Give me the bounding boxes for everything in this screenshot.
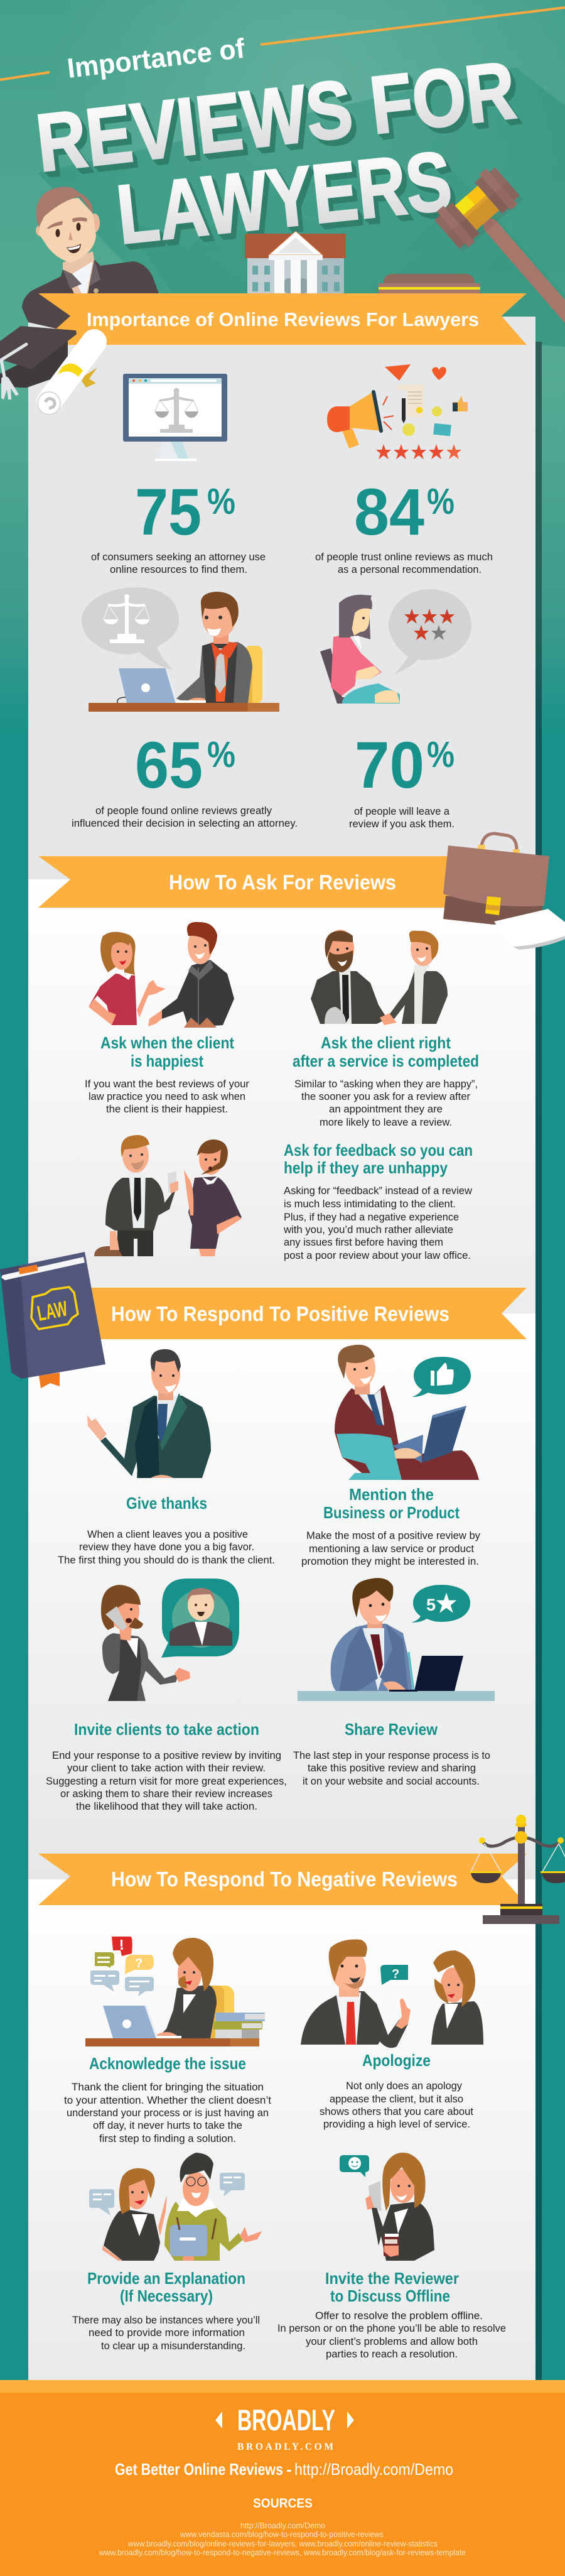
stat: 65%: 65 [135, 729, 203, 802]
text: ask after service [294, 1078, 478, 1128]
banner: How To Respond To Negative Reviews [38, 1854, 527, 1905]
heading: Acknowledge the issue: Acknowledge the issue [89, 2054, 246, 2073]
banner: Importance of Online Reviews [38, 293, 527, 345]
heading: Provide an Explanation: (If Necessary) [120, 2286, 213, 2305]
illustration: woman and man explaining [89, 2153, 262, 2261]
illustration: courthouse [245, 231, 346, 293]
text: ask after service: the sooner you ask for a review after [301, 1090, 470, 1102]
heading: Ask for feedback: help if they are unhappy [284, 1158, 448, 1177]
title: Lawyers: LAWYERS [113, 134, 456, 262]
text: acknowledge [64, 2081, 271, 2144]
panel: white content sheet [28, 317, 542, 2380]
heading: Invite the Reviewer: Invite the Reviewer [325, 2269, 459, 2288]
text: provide explanation: There may also be instances where you’ll [72, 2314, 260, 2326]
text: apologize: providing a high level of service. [323, 2118, 470, 2130]
illustration: woman on phone [101, 1579, 239, 1701]
heading: Mention the Business or Product [323, 1485, 460, 1522]
text: mention business: promotion they might be interested in. [301, 1555, 479, 1567]
stat: 84%: 84 [354, 476, 424, 549]
text: 65% caption: of people found online reviews greatly [95, 805, 272, 817]
text: acknowledge: Thank the client for bringing the situation [72, 2081, 264, 2093]
banner: Importance of Online Reviews: Importance of Online Reviews For Lawyers [87, 308, 479, 330]
stat: 75%: 75 [135, 476, 202, 549]
logo: Broadly: BROADLY [237, 2403, 335, 2437]
text: ask for feedback: any issues first before having them [284, 1236, 443, 1248]
banner: How To Respond To Positive Reviews: How To Respond To Positive Reviews [111, 1302, 449, 1325]
text: apologize: appease the client, but it also [330, 2093, 463, 2105]
banner: How To Respond To Negative Reviews: How To Respond To Negative Reviews [111, 1867, 458, 1891]
text: acknowledge: off day, it never hurts to take the [93, 2119, 242, 2131]
text: discuss offline: In person or on the phone you’ll be able to resolve [277, 2322, 506, 2334]
text: invite clients: or asking them to share their review increases [60, 1788, 272, 1800]
text: discuss offline [277, 2310, 506, 2360]
heading: Provide an Explanation [87, 2269, 245, 2305]
text: provide explanation: to clear up a misunderstanding. [101, 2340, 245, 2352]
illustration: man sharing review: 5 [426, 1595, 436, 1614]
illustration: man giving thanks [87, 1349, 211, 1478]
heading: Invite the Reviewer [325, 2269, 459, 2305]
text: give thanks: review they have done you a big favor. [79, 1541, 254, 1553]
illustration: woman with feedback bubbles: ? [135, 1957, 143, 1970]
illustration: two men shaking hands [311, 930, 448, 1025]
text: ask for feedback: is much less intimidating to the client. [284, 1198, 456, 1210]
text: share review [293, 1749, 490, 1787]
text: Broadly.com: BROADLY.COM [237, 2442, 333, 2452]
text: invite clients [46, 1749, 287, 1812]
text: 70% caption: review if you ask them. [349, 818, 455, 830]
text: discuss offline: Offer to resolve the problem offline. [315, 2310, 483, 2322]
illustration: woman and man talking [89, 922, 234, 1028]
text: apologize: shows others that you care about [320, 2106, 473, 2117]
title accent lines [0, 8, 565, 80]
text: invite clients: your client to take action with their review. [67, 1762, 266, 1774]
icon: monitor with scales [123, 374, 227, 461]
illustration: man apologizing to woman [301, 1940, 483, 2048]
text: ask when happiest [85, 1078, 249, 1115]
text: ask after service: Similar to “asking when they are happy”, [294, 1078, 478, 1090]
text: ask when happiest: If you want the best reviews of your [85, 1078, 249, 1090]
footer panel [0, 2380, 565, 2576]
illustration: diploma scroll [38, 342, 97, 415]
text: invite clients: the likelihood that they will take action. [76, 1800, 257, 1812]
text: mention business: mentioning a law service or product [309, 1543, 474, 1555]
text: discuss offline: your client’s problems and allow both [306, 2335, 478, 2347]
stat: 70%: % [427, 734, 455, 775]
text: acknowledge: understand your process or is just having an [67, 2107, 269, 2119]
illustration: lawyer [22, 187, 159, 333]
heading: Ask when the client [100, 1033, 234, 1070]
heading: Give thanks: Give thanks [126, 1494, 207, 1513]
text: acknowledge: to your attention. Whether the client doesn’t [64, 2094, 271, 2106]
heading: Invite the Reviewer: to Discuss Offline [330, 2286, 450, 2305]
illustration: woman with star rating [320, 589, 471, 704]
text: call to action: - [286, 2460, 292, 2479]
text: give thanks [58, 1528, 275, 1566]
stat: 70%: 70 [355, 729, 424, 802]
heading: Ask for feedback [284, 1141, 473, 1177]
text: mention business: Make the most of a positive review by [306, 1530, 480, 1541]
illustration: man sharing review [298, 1578, 495, 1701]
illustration: graduation cap [0, 326, 77, 399]
icon: megaphone and reviews [327, 364, 468, 459]
text: ask for feedback: Asking for “feedback” instead of a review [284, 1185, 473, 1197]
text: ask when happiest: the client is their happiest. [106, 1103, 228, 1115]
text: invite clients: Suggesting a return visit for more great experiences, [46, 1775, 287, 1787]
stat: 75%: % [207, 481, 235, 522]
text: mention business [301, 1530, 480, 1567]
text: 84% caption: of people trust online reviews as much [315, 551, 493, 563]
text: source list: www.broadly.com/blog/how-to-respond-to-negative-reviews, www.broadly.com/blog/ask-for-reviews-template [99, 2548, 466, 2557]
text: 70% caption: of people will leave a [354, 805, 450, 817]
text: 65% caption: influenced their decision in selecting an attorney. [72, 817, 298, 829]
text: apologize [320, 2080, 473, 2130]
illustration: gavel head [431, 163, 523, 253]
text: give thanks: The first thing you should do is thank the client. [58, 1554, 275, 1566]
heading: Ask the client right [293, 1033, 479, 1070]
text: ask for feedback [283, 1185, 473, 1261]
text: 75% caption: of consumers seeking an attorney use [91, 551, 266, 563]
text: invite clients: End your response to a positive review by inviting [52, 1749, 281, 1761]
heading: Ask when the client: is happiest [131, 1052, 203, 1070]
illustration: justice scales [470, 1815, 565, 1924]
text: share review: take this positive review and sharing [308, 1762, 476, 1774]
illustration: sound block [379, 274, 480, 297]
heading: Ask for feedback: Ask for feedback so you can [284, 1141, 473, 1160]
text: 75% caption: online resources to find them. [110, 563, 247, 575]
heading: Invite clients to take action: Invite clients to take action [74, 1720, 259, 1739]
text: apologize: Not only does an apology [346, 2080, 462, 2092]
heading: sources: SOURCES [253, 2496, 313, 2511]
text: 75% caption [91, 551, 266, 575]
heading: Provide an Explanation: Provide an Explanation [87, 2269, 245, 2288]
text: source list: http://Broadly.com/Demo [240, 2521, 325, 2530]
text: ask for feedback: Plus, if they had a negative experience [284, 1211, 459, 1223]
text: provide explanation [72, 2314, 260, 2352]
illustration: woman with tablet and coffee [340, 2153, 434, 2261]
illustration: law book: LAW [35, 1296, 70, 1326]
title: Importance of: Importance of [66, 33, 247, 84]
banner: How To Respond To Positive Reviews [38, 1288, 527, 1339]
text: give thanks: When a client leaves you a positive [87, 1528, 248, 1540]
text: call to action [115, 2460, 453, 2479]
heading: Ask the client right: Ask the client right [321, 1033, 451, 1052]
illustration: man apologizing to woman: ? [392, 1967, 399, 1981]
text: ask when happiest: law practice you need to ask when [89, 1090, 245, 1102]
heading: Mention the Business or Product: Business or Product [323, 1503, 460, 1522]
heading: Apologize: Apologize [362, 2051, 431, 2070]
illustration: briefcase [443, 834, 565, 950]
heading: Ask the client right: after a service is completed [293, 1052, 479, 1070]
text: 65% caption [72, 805, 298, 829]
text: call to action: http://Broadly.com/Demo [294, 2460, 453, 2479]
heading: Share Review: Share Review [345, 1720, 438, 1739]
text: call to action: Get Better Online Reviews [115, 2460, 283, 2479]
text: discuss offline: parties to reach a resolution. [326, 2348, 458, 2360]
text: source list [99, 2521, 466, 2557]
heading: Ask when the client: Ask when the client [100, 1033, 234, 1052]
text: ask after service: an appointment they are [329, 1103, 443, 1115]
text: 84% caption [315, 551, 493, 575]
text: acknowledge: first step to finding a solution. [99, 2133, 236, 2144]
stat: 65%: % [207, 734, 235, 775]
text: share review: The last step in your response process is to [293, 1749, 490, 1761]
illustration: man with laptop chair [335, 1345, 479, 1480]
banner: How To Ask For Reviews [38, 856, 527, 908]
text: provide explanation: need to provide more information [89, 2327, 245, 2339]
text: ask for feedback: with you, you’d much rather alleviate [283, 1224, 453, 1236]
text: share review: it on your website and social accounts. [303, 1775, 480, 1787]
text: 84% caption: as a personal recommendation. [338, 563, 482, 575]
illustration: man and woman with phone [94, 1135, 242, 1256]
text: source list: www.broadly.com/blog/online-reviews-for-lawyers, www.broadly.com/online-review-statistics [127, 2540, 438, 2548]
heading: Mention the Business or Product: Mention the [349, 1485, 434, 1504]
text: 70% caption [349, 805, 455, 830]
text: ask for feedback: post a poor review about your law office. [284, 1249, 471, 1261]
illustration: man at laptop [82, 587, 279, 712]
text: ask after service: more likely to leave a review. [320, 1116, 452, 1128]
stat: 84%: % [427, 481, 455, 522]
text: source list: www.vendasta.com/blog/how-to-respond-to-positive-reviews [180, 2530, 384, 2539]
banner: How To Ask For Reviews: How To Ask For Reviews [169, 871, 396, 894]
illustration: gavel handle [491, 226, 565, 320]
illustration: law book [0, 1252, 105, 1388]
illustration: woman with feedback bubbles [85, 1937, 265, 2046]
